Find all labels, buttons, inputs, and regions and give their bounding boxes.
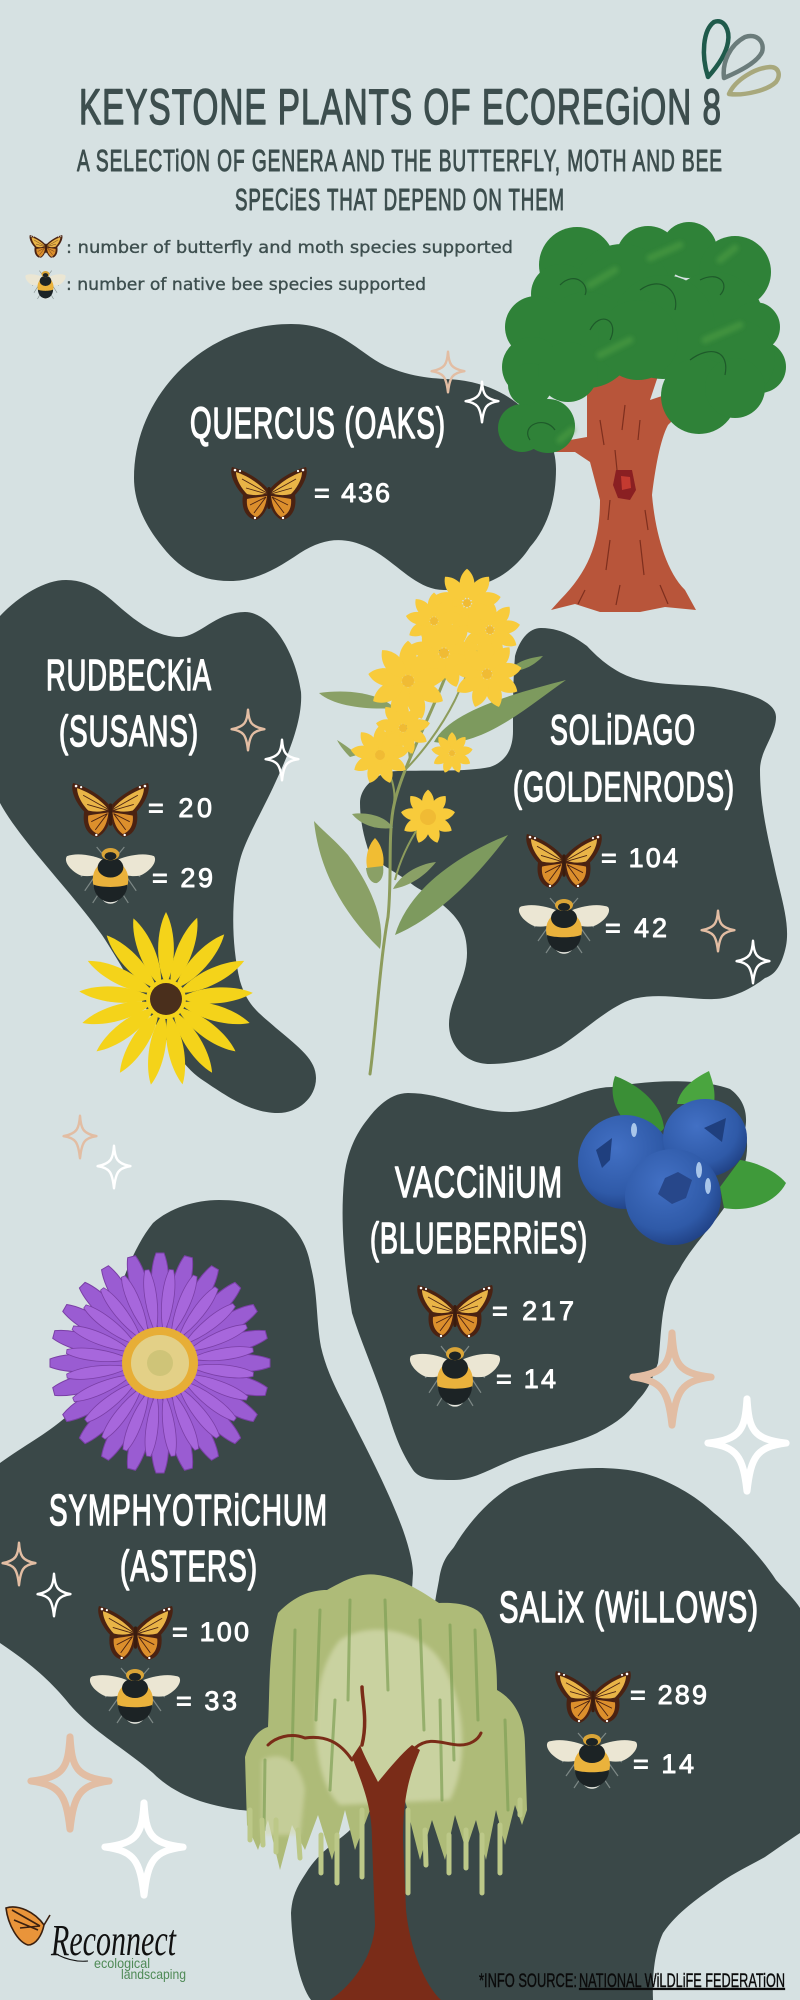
stat: salix butterflies (555, 1671, 707, 1723)
heading: rudbeckia: RUDBECKiA (46, 651, 212, 700)
sparkles: vaccinium (633, 1333, 786, 1491)
heading: symphyotrichum (49, 1486, 328, 1591)
heading: symphyotrichum: (ASTERS) (120, 1542, 258, 1591)
stat: solidago bees: = 42 (605, 913, 667, 943)
logo butterfly (6, 1907, 50, 1945)
logo: reconnect ecological landscaping (6, 1907, 186, 1982)
logo: reconnect ecological landscaping: landscaping (121, 1966, 186, 1982)
panel: vaccinium blob (343, 1081, 747, 1480)
stat: salix bees: = 14 (633, 1749, 694, 1779)
subtitle (77, 143, 723, 217)
panel: solidago blob (360, 628, 787, 1064)
sparkles: quercus (432, 352, 498, 422)
stat: quercus butterflies (231, 467, 390, 520)
legend: : number of native bee species supported (66, 275, 426, 295)
icon: three leaf loops (704, 21, 779, 94)
stat: salix butterflies: = 289 (630, 1680, 707, 1710)
stat: solidago butterflies (526, 834, 678, 888)
stat: aster butterflies (98, 1606, 249, 1660)
panel: quercus blob (134, 324, 556, 590)
illustration: goldenrod (314, 569, 566, 1074)
stat: solidago butterflies: = 104 (601, 843, 678, 873)
panel: symphyotrichum blob (0, 1200, 413, 1812)
panel: salix blob (291, 1468, 800, 2000)
stat: vaccinium butterflies (417, 1285, 574, 1338)
stat: vaccinium bees: = 14 (496, 1364, 556, 1394)
sparkles: solidago (702, 911, 769, 983)
stat: rudbeckia bees (66, 847, 213, 904)
legend: bee (25, 271, 66, 299)
stat: aster bees (90, 1668, 237, 1724)
stat: rudbeckia butterflies: = 20 (148, 793, 212, 823)
logo: reconnect ecological landscaping: ecological (94, 1955, 150, 1971)
stat: vaccinium butterflies: = 217 (492, 1296, 574, 1326)
legend (25, 235, 513, 299)
heading: symphyotrichum: SYMPHYOTRiCHUM (49, 1486, 328, 1535)
sparkles: lower left (31, 1737, 183, 1895)
sparkles: rudbeckia (232, 710, 298, 780)
source note: *INFO SOURCE: (479, 1971, 577, 1992)
illustration: black-eyed susan (79, 912, 253, 1086)
stat: vaccinium bees (410, 1346, 556, 1407)
subtitle: SPECiES THAT DEPEND ON THEM (235, 182, 565, 217)
illustration: willow tree (245, 1574, 527, 2000)
heading: solidago: SOLiDAGO (550, 706, 696, 753)
illustration: aster (50, 1253, 270, 1473)
illustration: blueberries (578, 1071, 786, 1245)
stat: aster bees: = 33 (176, 1686, 237, 1716)
stat: aster butterflies: = 100 (172, 1617, 249, 1647)
stat: rudbeckia bees: = 29 (152, 863, 213, 893)
stat: salix bees (547, 1733, 694, 1789)
logo: reconnect ecological landscaping: Reconnect (50, 1916, 177, 1965)
legend: butterfly (30, 235, 62, 258)
panel: rudbeckia blob (0, 580, 316, 1113)
heading: rudbeckia (46, 651, 212, 756)
heading: rudbeckia: (SUSANS) (59, 707, 199, 756)
sparkles: asters (3, 1543, 70, 1616)
heading: vaccinium: VACCiNiUM (395, 1158, 563, 1207)
illustration: oak tree (498, 222, 786, 612)
heading: solidago (513, 706, 735, 810)
stat: quercus butterflies: = 436 (314, 478, 390, 508)
heading: vaccinium (370, 1158, 588, 1263)
heading: quercus: QUERCUS (OAKS) (190, 399, 446, 448)
source note (479, 1971, 785, 1992)
sparkles: upper left of asters (64, 1116, 130, 1188)
stat: rudbeckia butterflies (72, 783, 212, 837)
stat: solidago bees (519, 898, 667, 954)
heading: vaccinium: (BLUEBERRiES) (370, 1214, 588, 1263)
legend: : number of butterfly and moth species supported (66, 238, 513, 258)
